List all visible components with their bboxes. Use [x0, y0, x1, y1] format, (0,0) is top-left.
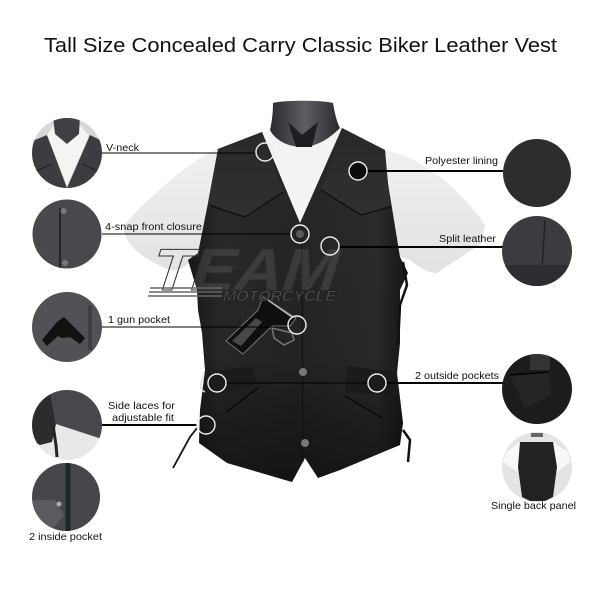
yoke panels	[208, 128, 390, 217]
watermark: TEAM Motorcycle: MOTORCYCLE	[221, 288, 338, 305]
mannequin neck	[270, 101, 340, 147]
thumbnail: 4-snap front closure	[32, 200, 102, 268]
vest body	[188, 128, 408, 482]
labels	[29, 142, 576, 543]
snaps	[296, 230, 304, 238]
watermark: TEAM Motorcycle: TEAM	[143, 236, 350, 303]
thumbnail: 2 outside pockets	[502, 354, 572, 424]
side laces	[173, 428, 197, 468]
pockets	[207, 366, 397, 396]
labels: adjustable fit	[112, 412, 174, 424]
highlight circles	[197, 143, 386, 434]
labels: Polyester lining	[425, 155, 498, 167]
labels: 2 inside pocket	[29, 531, 102, 543]
thumbnail: 2 inside pocket	[32, 463, 100, 531]
labels: V-neck	[106, 142, 140, 154]
vest photo on mannequin	[123, 101, 485, 482]
labels: Side laces for	[108, 400, 176, 412]
thumbnail: split leather	[500, 215, 575, 287]
labels: 4-snap front closure	[105, 221, 202, 233]
labels: Single back panel	[491, 500, 576, 512]
thumbnail: polyester lining	[503, 139, 571, 207]
thumbnail: 1 gun pocket	[32, 292, 102, 362]
thumbnail: side laces	[30, 390, 105, 460]
title: Tall Size Concealed Carry Classic Biker Leather Vest	[44, 35, 557, 57]
labels: Split leather	[439, 233, 497, 245]
thumbnail: single back panel	[502, 432, 572, 502]
leader lines	[102, 153, 503, 425]
gun in pocket	[226, 297, 296, 354]
shirt sleeves and torso	[123, 149, 485, 273]
labels: 2 outside pockets	[415, 370, 499, 382]
labels: 1 gun pocket	[108, 314, 170, 326]
thumbnail: V-neck	[32, 118, 102, 188]
